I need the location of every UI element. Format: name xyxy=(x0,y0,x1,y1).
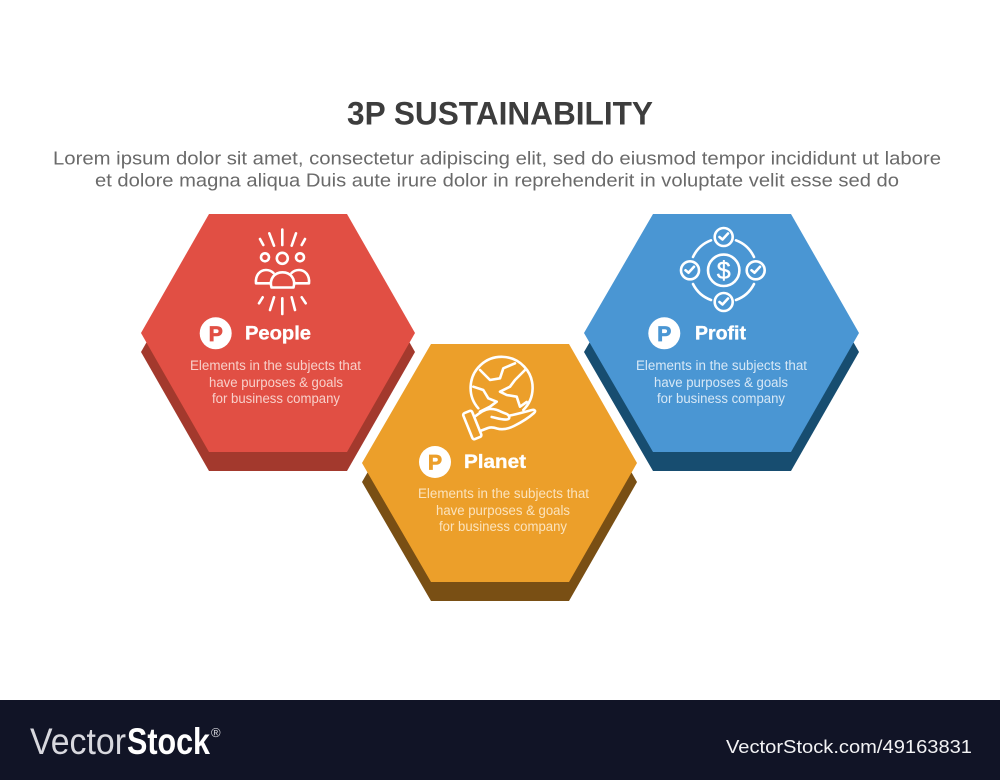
panel: people xyxy=(141,214,415,471)
description: profit xyxy=(636,358,807,406)
footer image id: VectorStock.com/49163831 xyxy=(726,737,972,757)
description: profit: Elements in the subjects that xyxy=(636,358,807,373)
hexagon shadow: profit xyxy=(584,233,859,471)
description: people: for business company xyxy=(212,391,340,406)
hexagon: profit xyxy=(584,214,859,452)
description: people xyxy=(190,358,361,406)
hexagon shadow: planet xyxy=(362,363,637,601)
badge: P profit xyxy=(648,317,680,349)
intro text: Lorem ipsum dolor sit amet, consectetur adipiscing elit, sed do eiusmod tempor incididunt ut labore xyxy=(53,148,941,168)
intro text: et dolore magna aliqua Duis aute irure dolor in reprehenderit in voluptate velit esse sed do xyxy=(95,170,899,190)
description: planet: Elements in the subjects that xyxy=(418,486,589,501)
hexagon: planet xyxy=(362,344,637,582)
description: planet: for business company xyxy=(439,519,567,534)
title: 3P SUSTAINABILITY xyxy=(347,96,653,132)
icon: globe in hand xyxy=(463,357,535,440)
description: people: Elements in the subjects that xyxy=(190,358,361,373)
hexagon shadow: people xyxy=(141,233,415,471)
icon: dollar with check marks: $ xyxy=(717,257,731,285)
hexagon: people xyxy=(141,214,415,452)
icon: people group with rays xyxy=(256,230,309,314)
icon: dollar with check marks xyxy=(681,228,765,311)
footer logo: Vector xyxy=(30,721,126,762)
footer logo: ® xyxy=(211,725,221,740)
footer logo xyxy=(30,721,221,762)
heading: planet: Planet xyxy=(464,451,527,473)
badge: P profit: P xyxy=(657,323,671,346)
footer band xyxy=(0,700,1000,780)
description: profit: have purposes & goals xyxy=(654,375,788,390)
panel: profit xyxy=(584,214,859,471)
description: profit: for business company xyxy=(657,391,785,406)
heading: people: People xyxy=(245,322,311,344)
description: people: have purposes & goals xyxy=(209,375,343,390)
heading: profit: Profit xyxy=(695,322,746,344)
description: planet xyxy=(418,486,589,534)
footer logo: Stock xyxy=(127,721,210,762)
intro text xyxy=(53,148,941,190)
badge: P planet xyxy=(419,446,451,478)
badge: P people: P xyxy=(209,323,223,346)
badge: P planet: P xyxy=(428,452,442,474)
description: planet: have purposes & goals xyxy=(436,503,570,518)
badge: P people xyxy=(200,317,232,349)
panel: planet xyxy=(362,344,637,601)
